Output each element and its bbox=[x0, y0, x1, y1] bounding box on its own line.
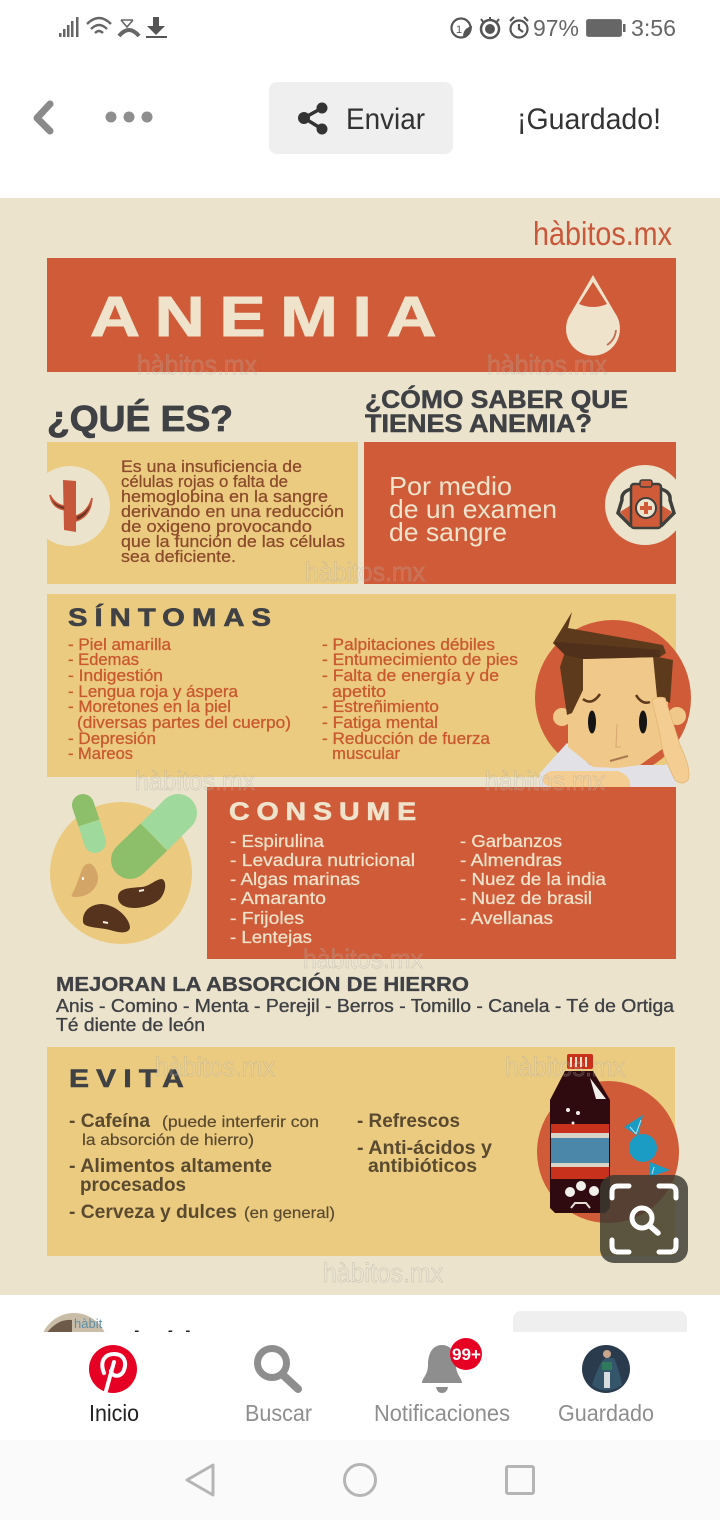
icon: blood drop bbox=[566, 275, 620, 356]
icon: signal bars bbox=[59, 17, 78, 37]
icon: blood vessel bbox=[47, 466, 110, 546]
toolbar bbox=[37, 82, 661, 154]
avoid list left: la absorción de hierro) bbox=[82, 1132, 254, 1149]
icon: download bbox=[146, 17, 167, 38]
tab: search: Buscar bbox=[245, 1400, 312, 1426]
avoid heading: EVITA bbox=[69, 1065, 191, 1093]
avoid list left: - Cafeína bbox=[69, 1111, 150, 1132]
infographic bbox=[0, 198, 720, 1295]
watermarks: hàbitos.mx bbox=[305, 557, 425, 587]
illustration: soda and candy bbox=[537, 1054, 679, 1223]
brand logo: hàbitos.mx bbox=[533, 215, 672, 252]
blood test text: Por medio bbox=[389, 471, 512, 501]
definition text: hemoglobina en la sangre bbox=[121, 488, 328, 506]
tab: home: Inicio bbox=[89, 1400, 139, 1426]
icon: candy bbox=[624, 1115, 670, 1177]
symptoms list right: - Entumecimiento de pies bbox=[322, 651, 518, 669]
symptoms list left: - Depresión bbox=[68, 730, 156, 748]
author avatar: hàbit bbox=[74, 1316, 103, 1331]
avoid list left: - Cerveza y dulces bbox=[69, 1202, 237, 1223]
avoid list left: - Alimentos altamente bbox=[69, 1156, 272, 1177]
icon: nav back bbox=[187, 1465, 213, 1495]
avoid list right: - Refrescos bbox=[357, 1111, 460, 1132]
consume list left: - Espirulina bbox=[230, 831, 324, 851]
consume list left bbox=[230, 831, 415, 947]
icon: large capsule bbox=[111, 794, 197, 879]
consume heading: CONSUME bbox=[229, 798, 423, 826]
icon: medical clipboard bbox=[605, 465, 676, 545]
icon: nav home bbox=[344, 1464, 376, 1496]
symptoms list left: - Edemas bbox=[68, 651, 139, 669]
icon: small capsule bbox=[72, 794, 106, 853]
symptoms list left: - Piel amarilla bbox=[68, 636, 172, 654]
icon: eye bbox=[481, 17, 499, 38]
avoid list right: - Anti-ácidos y bbox=[357, 1138, 492, 1159]
watermarks: hàbitos.mx bbox=[155, 1052, 275, 1082]
watermarks: hàbitos.mx bbox=[323, 1258, 443, 1288]
bottom tab bar bbox=[0, 1332, 720, 1440]
watermarks: hàbitos.mx bbox=[505, 1052, 625, 1082]
iron absorption text: MEJORAN LA ABSORCIÓN DE HIERRO bbox=[56, 972, 469, 996]
avoid list left: (puede interferir con bbox=[162, 1114, 319, 1131]
symptoms list right: - Estreñimiento bbox=[322, 698, 439, 716]
avoid list right: antibióticos bbox=[368, 1156, 477, 1177]
symptoms list right bbox=[322, 636, 518, 763]
consume list left: - Lentejas bbox=[230, 927, 312, 947]
definition text bbox=[121, 458, 345, 566]
symptoms list left: - Indigestión bbox=[68, 667, 163, 685]
consume list right: - Avellanas bbox=[460, 908, 553, 928]
illustration: tired man bbox=[535, 612, 691, 788]
definition text: derivando en una reducción bbox=[121, 503, 344, 521]
avoid list left bbox=[69, 1111, 335, 1223]
symptoms list left bbox=[68, 636, 291, 763]
symptoms list right: - Fatiga mental bbox=[322, 714, 438, 732]
watermarks: hàbitos.mx bbox=[303, 944, 423, 974]
consume list right: - Nuez de la india bbox=[460, 869, 606, 889]
consume list right: - Garbanzos bbox=[460, 831, 562, 851]
definition text: sea deficiente. bbox=[121, 548, 236, 566]
watermarks: hàbitos.mx bbox=[485, 766, 605, 796]
watermarks: hàbitos.mx bbox=[487, 350, 607, 380]
send button bbox=[269, 82, 453, 154]
symptoms list left: - Lengua roja y áspera bbox=[68, 683, 239, 701]
saved label: ¡Guardado! bbox=[517, 103, 661, 136]
iron absorption text bbox=[56, 972, 675, 1035]
definition text: que la función de las células bbox=[121, 533, 345, 551]
symptoms list left: (diversas partes del cuerpo) bbox=[77, 714, 291, 732]
icon: wifi bbox=[87, 18, 111, 33]
panel: avoid bbox=[47, 1047, 679, 1256]
heading: how to know: TIENES ANEMIA? bbox=[365, 410, 592, 438]
heading: how to know: ¿CÓMO SABER QUE bbox=[365, 384, 628, 414]
icon: battery bbox=[586, 20, 626, 36]
illustration: pills and beans bbox=[50, 794, 197, 944]
avoid list left: procesados bbox=[80, 1175, 186, 1196]
android navigation bar bbox=[0, 1440, 720, 1520]
icon: alarm bbox=[510, 17, 528, 38]
visual search button bbox=[600, 1175, 688, 1263]
iron absorption text: Té diente de león bbox=[56, 1015, 205, 1035]
heading: how to know bbox=[365, 384, 628, 438]
author avatar bbox=[40, 1313, 108, 1381]
tab: notifications bbox=[374, 1338, 510, 1426]
tab: search bbox=[245, 1348, 312, 1426]
iron absorption text: Anis - Comino - Menta - Perejil - Berros - Tomillo - Canela - Té de Ortiga bbox=[56, 996, 675, 1016]
panel: definition bbox=[30, 442, 358, 584]
title: ANEMIA bbox=[90, 285, 451, 349]
blood test text: de un examen bbox=[389, 494, 557, 524]
symptoms heading: SÍNTOMAS bbox=[68, 603, 278, 632]
icon: data saver bbox=[452, 18, 472, 38]
symptoms list right: muscular bbox=[332, 745, 401, 763]
icon: share bbox=[298, 103, 327, 134]
symptoms list right: - Reducción de fuerza bbox=[322, 730, 491, 748]
panel: blood test bbox=[364, 442, 685, 584]
avoid list right bbox=[357, 1111, 492, 1177]
tab: saved: Guardado bbox=[558, 1400, 654, 1426]
symptoms list right: - Palpitaciones débiles bbox=[322, 636, 495, 654]
consume list left: - Algas marinas bbox=[230, 869, 360, 889]
icon: back chevron bbox=[37, 104, 50, 131]
panel: symptoms bbox=[47, 594, 691, 788]
tab: notifications: Notificaciones bbox=[374, 1400, 510, 1426]
consume list right: - Nuez de brasil bbox=[460, 888, 592, 908]
icon: missed call bbox=[119, 20, 139, 36]
consume list right: - Almendras bbox=[460, 850, 562, 870]
symptoms list left: - Moretones en la piel bbox=[68, 698, 231, 716]
status bar bbox=[59, 15, 676, 41]
symptoms list left: - Mareos bbox=[68, 745, 133, 763]
clock: 3:56 bbox=[631, 15, 676, 41]
blood test text bbox=[389, 471, 557, 547]
heading: what is: ¿QUÉ ES? bbox=[47, 398, 233, 439]
follow button bbox=[513, 1311, 687, 1371]
panel: title bbox=[47, 258, 676, 372]
symptoms list right: apetito bbox=[332, 683, 386, 701]
icon: data saver: 1 bbox=[456, 24, 462, 36]
icon: beans bbox=[72, 864, 165, 932]
symptoms list right: - Falta de energía y de bbox=[322, 667, 499, 685]
panel: consume bbox=[207, 787, 676, 959]
send label: Enviar bbox=[346, 103, 425, 136]
notification badge: 99+ bbox=[452, 1345, 481, 1364]
icon: soda bottle bbox=[550, 1054, 610, 1213]
definition text: células rojas o falta de bbox=[121, 473, 288, 491]
watermarks bbox=[135, 350, 625, 1288]
icon: more dots bbox=[106, 112, 152, 122]
watermarks: hàbitos.mx bbox=[135, 766, 255, 796]
definition text: Es una insuficiencia de bbox=[121, 458, 302, 476]
blood test text: de sangre bbox=[389, 517, 507, 547]
consume list right bbox=[460, 831, 606, 928]
watermarks: hàbitos.mx bbox=[137, 350, 257, 380]
consume list left: - Levadura nutricional bbox=[230, 850, 415, 870]
tab: home bbox=[89, 1345, 139, 1426]
definition text: de oxigeno provocando bbox=[121, 518, 312, 536]
tab: saved bbox=[558, 1345, 654, 1426]
battery percent: 97% bbox=[533, 15, 579, 41]
consume list left: - Frijoles bbox=[230, 908, 304, 928]
icon: nav recent bbox=[506, 1466, 534, 1494]
post author row bbox=[40, 1311, 687, 1381]
consume list left: - Amaranto bbox=[230, 888, 326, 908]
author name: habitos.mx bbox=[133, 1326, 285, 1356]
avoid list left: (en general) bbox=[244, 1205, 335, 1222]
